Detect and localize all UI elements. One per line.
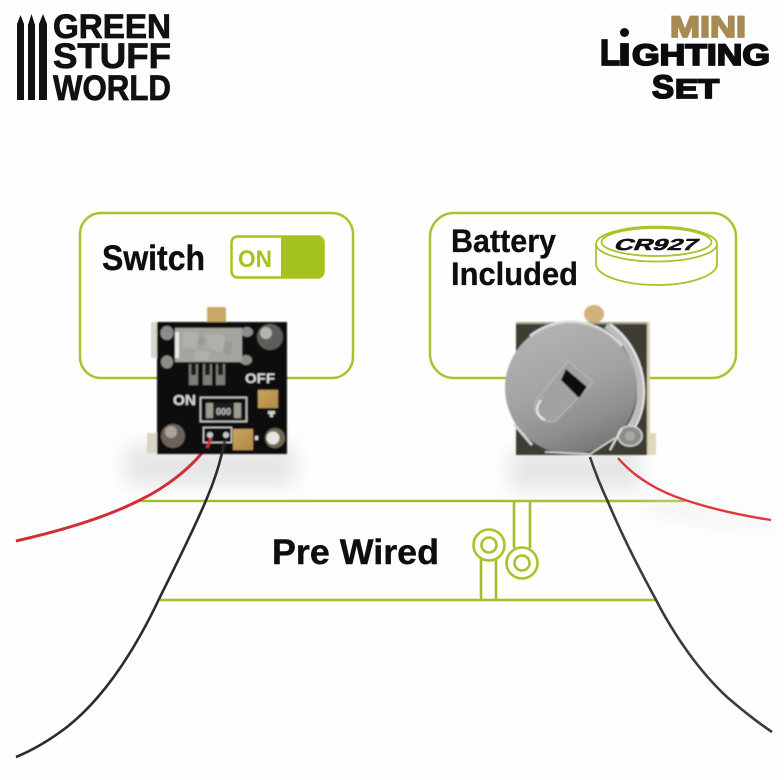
- switch label: Switch: [102, 239, 205, 278]
- panel: switch: [80, 213, 353, 378]
- title: Mini Lighting Set: [600, 11, 770, 105]
- brand logo: Green Stuff World: [17, 8, 171, 108]
- logo wordmark: GREEN: [53, 8, 171, 46]
- icon: on toggle: [232, 236, 324, 278]
- ON silkscreen: ON: [173, 392, 196, 409]
- icon: three pencils: [17, 14, 47, 100]
- resistor: 000: [216, 407, 231, 418]
- icon: wire terminals: [474, 530, 538, 578]
- title word: SET: S: [652, 69, 674, 105]
- solder lug: [618, 426, 642, 446]
- logo wordmark: STUFF: [53, 37, 171, 76]
- title word: MINI: MINI: [670, 11, 746, 44]
- wires: switch module: [16, 444, 222, 757]
- panel outline: [80, 213, 353, 378]
- logo wordmark: WORLD: [53, 69, 171, 108]
- resistor: [200, 398, 246, 422]
- logo wordmark: [53, 8, 171, 108]
- title word: SET: ET: [675, 74, 720, 104]
- title dot over the i: [620, 28, 629, 37]
- icon: CR927 coin battery: CR927: [611, 236, 702, 254]
- red wire right: [618, 458, 771, 520]
- gold pads: [258, 390, 278, 408]
- slide switch body: [175, 328, 242, 362]
- battery clip tongue: [535, 361, 593, 422]
- icon: on toggle: ON: [238, 246, 272, 273]
- wire connector: [204, 428, 232, 442]
- soft shadows: [125, 445, 772, 532]
- board: [157, 322, 287, 454]
- icon: CR927 coin battery: [596, 226, 717, 285]
- OFF silkscreen: OFF: [245, 370, 275, 386]
- panel outline: [430, 213, 736, 378]
- title word: SET: [652, 69, 720, 105]
- title word: LIGHTING: L: [600, 32, 620, 73]
- title word: LIGHTING: [600, 32, 770, 73]
- slider tab: [584, 305, 604, 323]
- glue edge: [647, 322, 650, 455]
- board: [516, 322, 647, 455]
- battery label: [451, 223, 578, 292]
- panel: pre wired: [140, 501, 685, 600]
- battery label: Battery: [451, 223, 556, 259]
- photo: switch circuit board: [147, 307, 287, 454]
- wire ends over board: [207, 438, 211, 448]
- black wire left: [16, 453, 222, 757]
- solder pads: [160, 326, 253, 368]
- battery rim: [606, 326, 640, 432]
- silver solder blobs: [257, 324, 283, 350]
- title word: LIGHTING: GHTING: [632, 39, 770, 72]
- battery label: Included: [451, 256, 578, 292]
- slider tab: [207, 307, 226, 327]
- panel: battery included: [430, 213, 736, 378]
- wires: battery module: [590, 457, 772, 732]
- battery disc: [505, 322, 637, 454]
- red wire left: [16, 444, 209, 541]
- connector lines: [140, 501, 685, 600]
- white glue edges: [151, 322, 159, 358]
- switch pins: [189, 364, 225, 385]
- clip window: [561, 369, 587, 398]
- photo: battery holder board: [505, 305, 656, 455]
- black wire right: [590, 457, 772, 732]
- pre wired label: Pre Wired: [272, 533, 439, 572]
